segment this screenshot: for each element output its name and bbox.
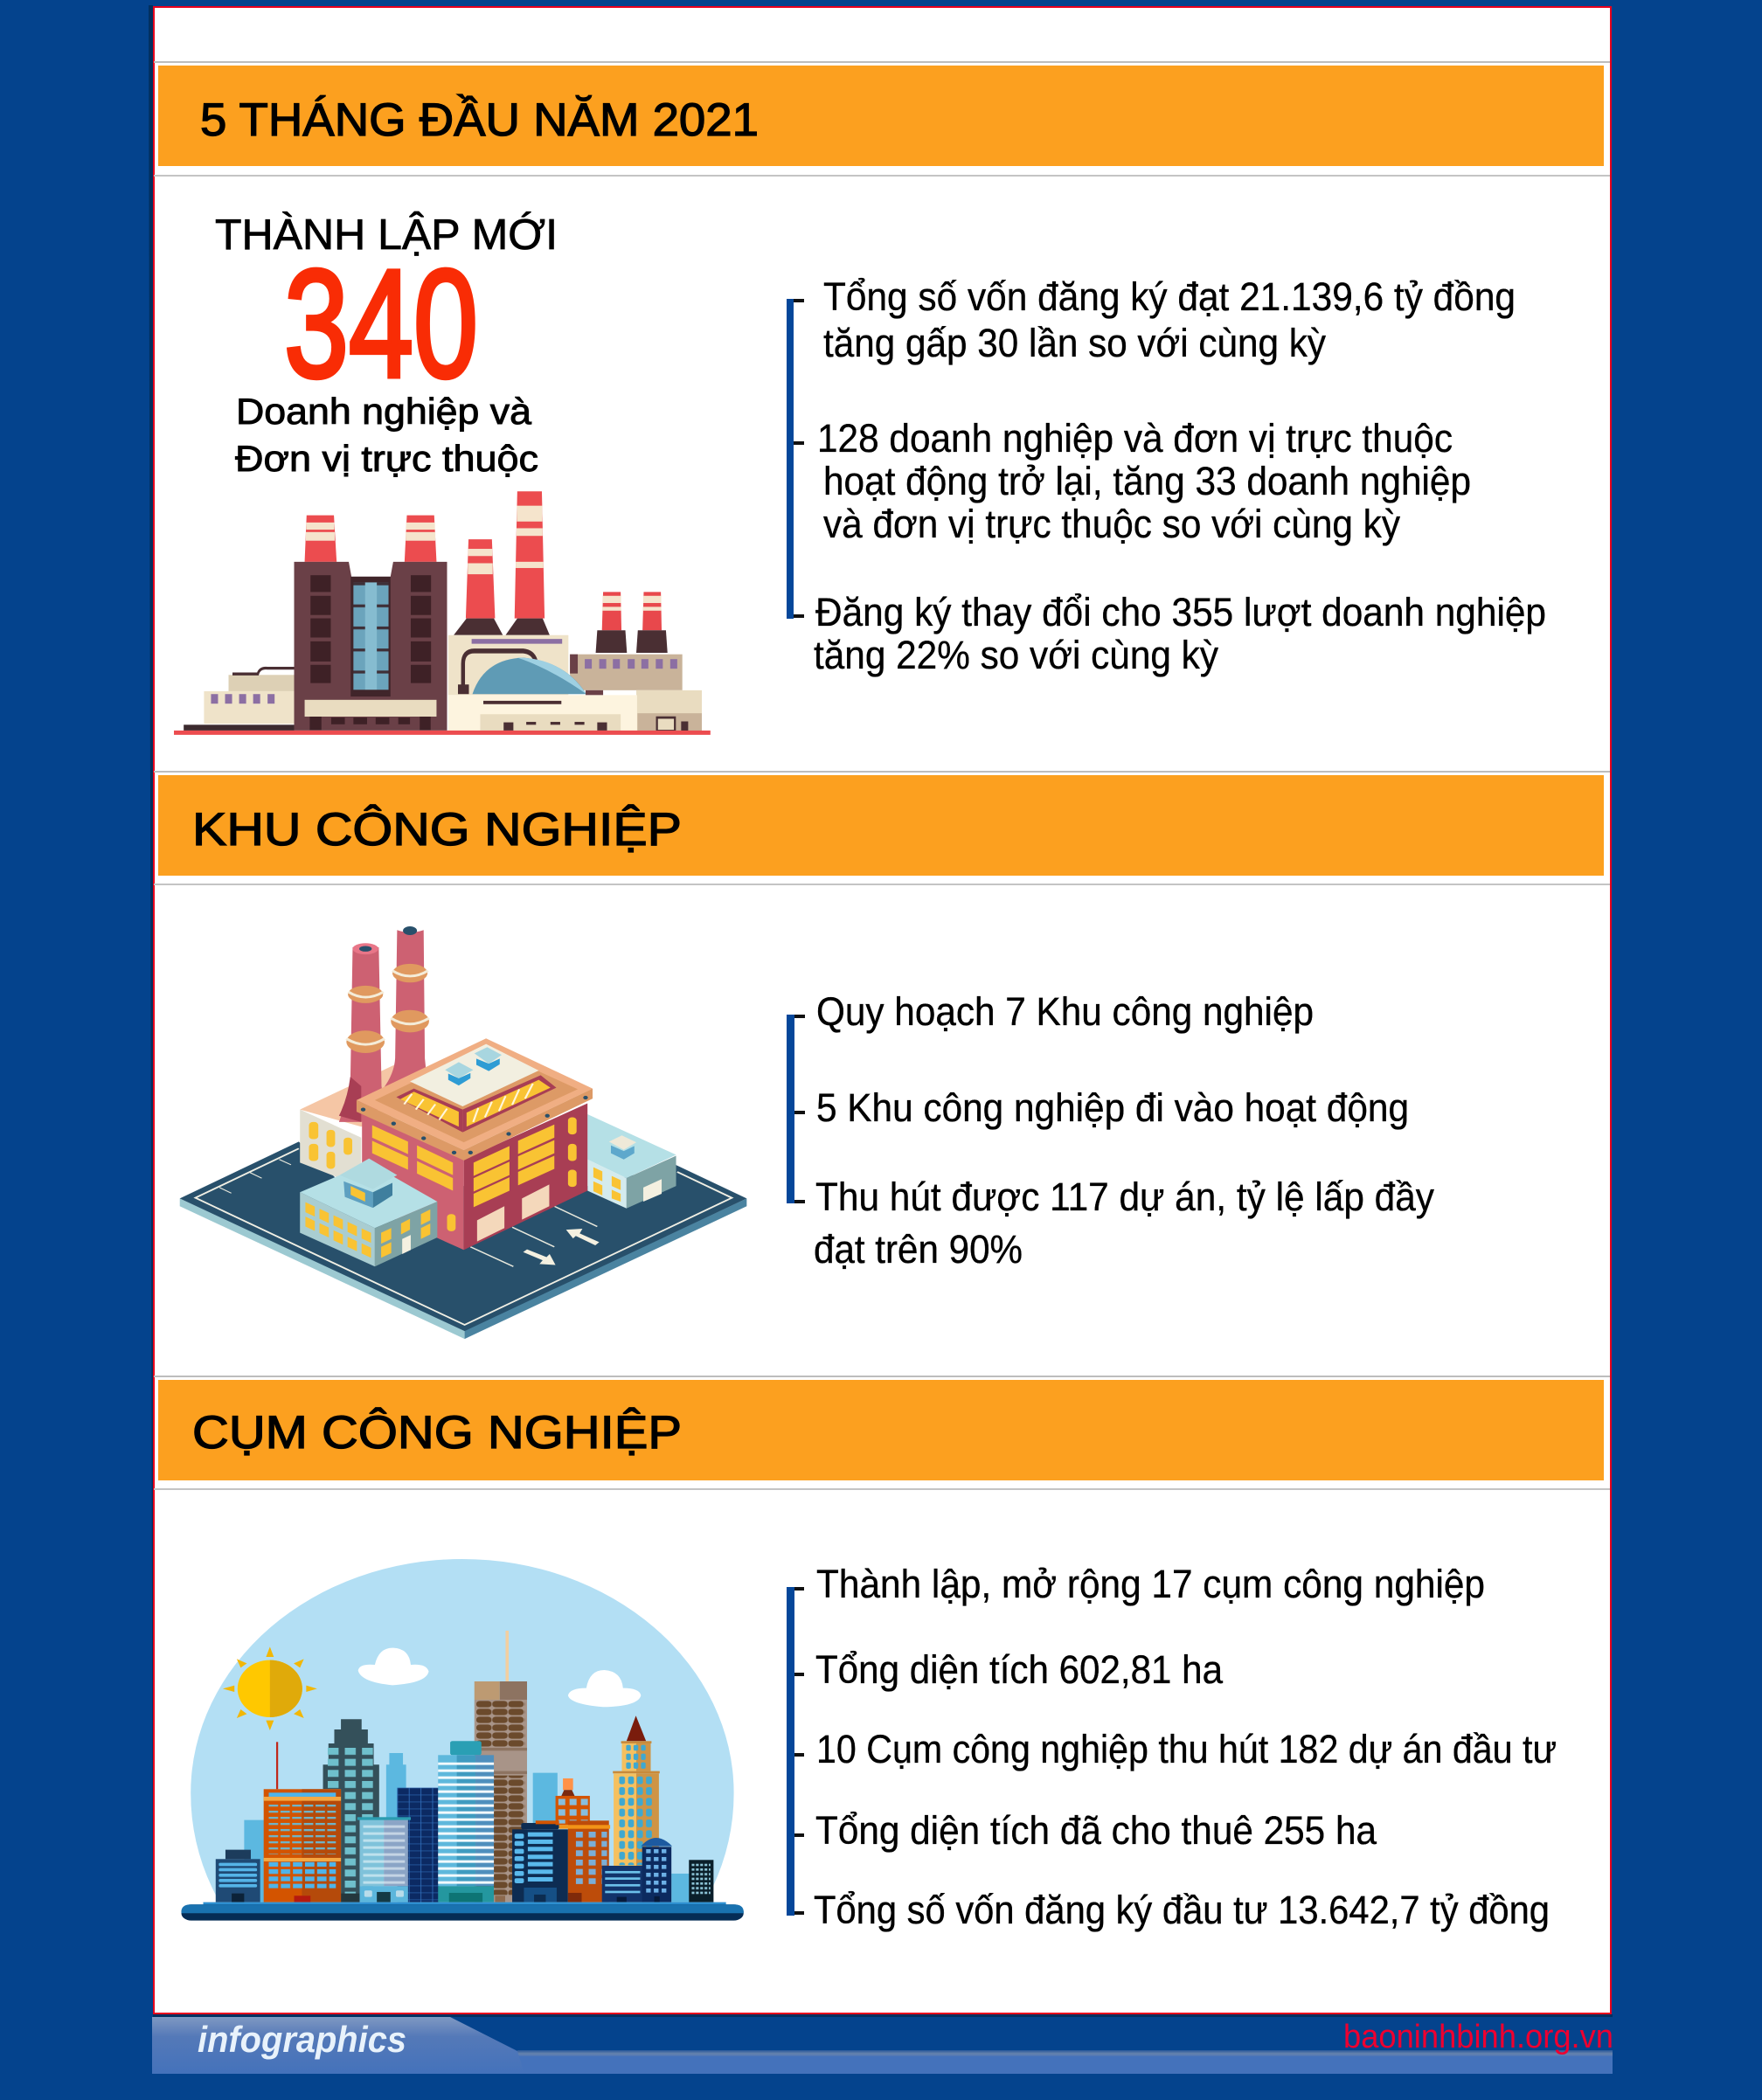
- section banner: 5 tháng đầu năm 2021: [158, 66, 1604, 166]
- list: business registration figures: 128 doanh nghiệp và đơn vị trực thuộc: [817, 416, 1453, 461]
- front small building: [300, 1162, 437, 1228]
- bracket: [787, 1587, 804, 1916]
- chimneys: [383, 930, 427, 1089]
- sky dome: [191, 1559, 734, 1902]
- list: business registration figures: và đơn vị trực thuộc so với cùng kỳ: [823, 502, 1400, 546]
- illustration: city skyline: [181, 1559, 744, 1921]
- list: industrial clusters: [787, 1562, 1557, 1932]
- list: industrial clusters: Tổng số vốn đăng ký đầu tư 13.642,7 tỷ đồng: [814, 1888, 1550, 1932]
- illustration: factory skyline: [174, 491, 711, 735]
- dark blue block: [512, 1823, 568, 1902]
- footer label: infographics: infographics: [198, 2019, 406, 2060]
- mid building: [448, 635, 568, 695]
- ground base: [181, 1902, 744, 1921]
- list: industrial zones: đạt trên 90%: [814, 1227, 1023, 1272]
- panel: 5 tháng đầu năm 2021 section: [154, 61, 1610, 735]
- teal striped tower: [438, 1741, 494, 1902]
- section banner: cụm công nghiệp: [158, 1380, 1604, 1480]
- left low building: [184, 724, 295, 731]
- orange building: [264, 1742, 341, 1902]
- list: industrial zones: Thu hút được 117 dự án, tỷ lệ lấp đầy: [815, 1175, 1434, 1219]
- illustration: isometric factory: [180, 926, 746, 1339]
- black small tower: [689, 1860, 713, 1902]
- navy grid tower: [397, 1788, 440, 1902]
- panel shadow: [149, 5, 1613, 2017]
- panel: cụm công nghiệp section: [154, 1376, 1610, 1932]
- list: industrial zones: [787, 989, 1434, 1272]
- section banner: khu công nghiệp: [158, 775, 1604, 876]
- main tower: [295, 562, 447, 731]
- list: industrial clusters: 10 Cụm công nghiệp thu hút 182 dự án đầu tư: [816, 1727, 1557, 1771]
- list: business registration figures: Tổng số vốn đăng ký đạt 21.139,6 tỷ đồng: [823, 274, 1516, 319]
- low front building: [636, 690, 702, 731]
- list: business registration figures: [787, 274, 1546, 677]
- small blue building: [216, 1850, 260, 1902]
- main building: [362, 1111, 464, 1250]
- list: business registration figures: tăng 22% so với cùng kỳ: [814, 633, 1218, 677]
- ground plate: [180, 1198, 465, 1339]
- ground line: [174, 731, 711, 735]
- background towers: [244, 1753, 690, 1902]
- dark stepped tower: [323, 1719, 379, 1902]
- orange right building: [536, 1778, 610, 1902]
- section banner: khu công nghiệp: KHU CÔNG NGHIỆP: [192, 804, 682, 856]
- list: industrial clusters: Thành lập, mở rộng 17 cụm công nghiệp: [816, 1562, 1485, 1606]
- clouds: [358, 1648, 641, 1707]
- list: industrial clusters: Tổng diện tích 602,81 ha: [815, 1647, 1224, 1692]
- cream back building: [300, 1065, 461, 1126]
- list: industrial zones: Quy hoạch 7 Khu công nghiệp: [816, 989, 1314, 1034]
- right blue building: [587, 1114, 676, 1178]
- subheading: doanh nghiệp và đơn vị trực thuộc: [235, 391, 538, 479]
- dome: [473, 658, 586, 694]
- right building: [570, 655, 683, 690]
- yellow clock tower: [613, 1715, 660, 1867]
- sun: [223, 1646, 317, 1730]
- bracket: [787, 1015, 805, 1203]
- list: industrial clusters: Tổng diện tích đã cho thuê 255 ha: [815, 1808, 1377, 1853]
- list: industrial zones: 5 Khu công nghiệp đi vào hoạt động: [816, 1085, 1409, 1130]
- footer strip: [152, 2017, 1613, 2074]
- road arrows: [566, 1229, 600, 1245]
- list: business registration figures: tăng gấp 30 lần so với cùng kỳ: [823, 321, 1326, 365]
- light stripe building: [357, 1817, 411, 1902]
- section banner: cụm công nghiệp: CỤM CÔNG NGHIỆP: [192, 1407, 682, 1459]
- footer source: baoninhbinh.org.vn: baoninhbinh.org.vn: [1343, 2019, 1613, 2055]
- heading: thành lập mới: THÀNH LẬP MỚI: [215, 211, 558, 259]
- list: business registration figures: Đăng ký thay đổi cho 355 lượt doanh nghiệp: [815, 590, 1546, 634]
- section banner: 5 tháng đầu năm 2021: 5 THÁNG ĐẦU NĂM 2021: [200, 94, 759, 146]
- navy domed building: [602, 1838, 672, 1902]
- tan tower: [475, 1631, 527, 1902]
- panel: khu công nghiệp section: [154, 771, 1610, 1339]
- rooftop vents: [448, 1073, 470, 1085]
- list: business registration figures: hoạt động trở lại, tăng 33 doanh nghiệp: [823, 459, 1471, 503]
- subheading: doanh nghiệp và đơn vị trực thuộc: Đơn vị trực thuộc: [235, 438, 538, 479]
- big number: 340: 340: [284, 239, 478, 410]
- bracket: [787, 299, 804, 619]
- main white panel: [154, 7, 1611, 2013]
- subheading: doanh nghiệp và đơn vị trực thuộc: Doanh nghiệp và: [236, 391, 532, 432]
